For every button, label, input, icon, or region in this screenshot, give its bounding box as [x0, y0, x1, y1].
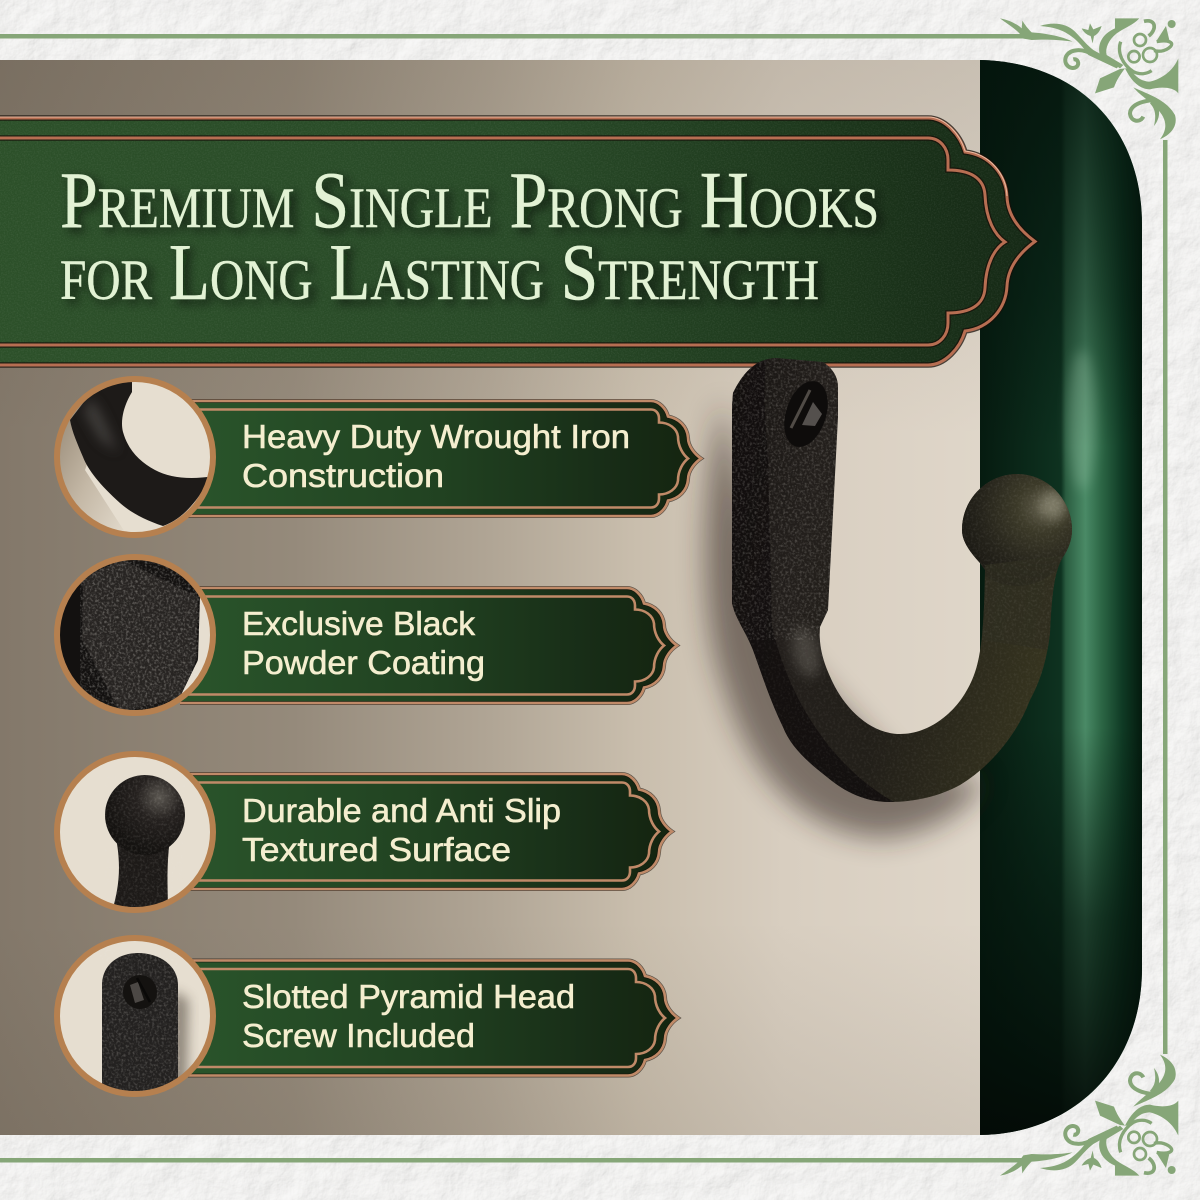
- label text 1: Heavy Duty Wrought Iron: [242, 418, 630, 455]
- label text 3: Textured Surface: [242, 831, 511, 868]
- main hook: [706, 350, 1080, 838]
- label text 2: Exclusive Black: [242, 605, 476, 642]
- hook shadow: [706, 400, 985, 838]
- label plate 2: [180, 588, 677, 703]
- hook body: [720, 350, 1080, 815]
- ornament: top right corner: [1000, 18, 1178, 139]
- title text: Premium Single Prong Hooks: [60, 155, 879, 245]
- label text 2: [242, 605, 485, 681]
- feature 4: [57, 938, 678, 1100]
- label text 3: [242, 792, 561, 868]
- feature 2: [50, 550, 677, 720]
- banner inner border: [0, 138, 1005, 345]
- feature 1: [50, 379, 701, 540]
- banner outer border: [0, 117, 1035, 365]
- label text 2: Powder Coating: [242, 644, 485, 681]
- green curtain panel: [980, 60, 1142, 1136]
- detail circle: ball tip: [57, 754, 213, 912]
- title text: for Long Lasting Strength: [60, 227, 819, 317]
- label text 4: [242, 978, 575, 1054]
- label text 1: [242, 418, 630, 494]
- screw recess: [776, 375, 836, 453]
- label text 4: Screw Included: [242, 1017, 475, 1054]
- title text: [60, 155, 879, 317]
- label plate 3: [180, 774, 672, 889]
- label plate 4: [180, 960, 678, 1076]
- ornament: bottom right corner: [1000, 1055, 1178, 1176]
- label text 4: Slotted Pyramid Head: [242, 978, 575, 1015]
- detail circle: curved hook: [50, 379, 215, 540]
- banner plate: [0, 115, 1040, 370]
- beige wall: [0, 60, 980, 1136]
- label plate 1: [180, 401, 701, 516]
- label text 3: Durable and Anti Slip: [242, 792, 561, 829]
- detail circle: powder texture: [50, 550, 213, 720]
- label text 1: Construction: [242, 457, 444, 494]
- title banner: [0, 115, 1040, 370]
- feature 3: [57, 754, 672, 912]
- detail circle: slotted screw: [57, 938, 213, 1100]
